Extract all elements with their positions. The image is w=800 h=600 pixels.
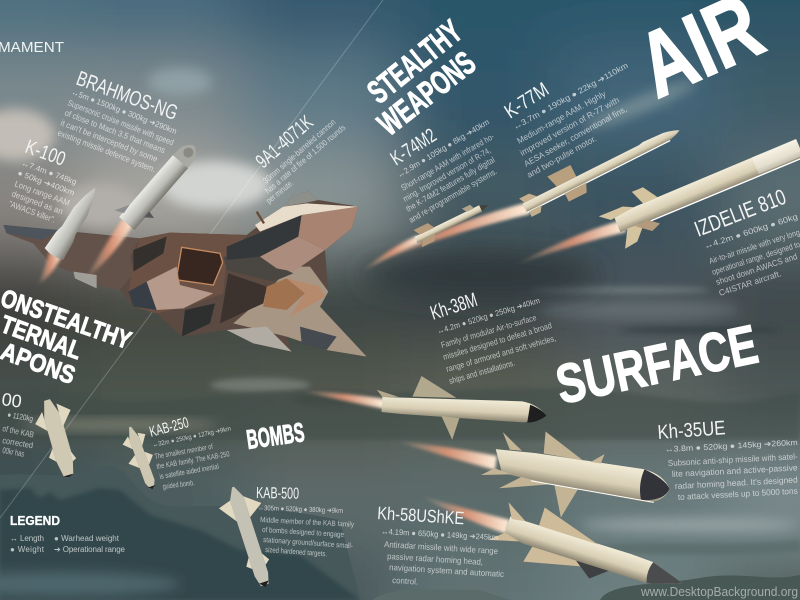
block: kh-35ue: to attack vessels up to 5000 tons: [678, 486, 798, 502]
heading: stealthy weapons: WEAPONS: [371, 44, 482, 143]
block: kab-250: guided bomb.: [162, 478, 195, 491]
missile plumes: [38, 203, 626, 534]
block: kab-1500: [0, 389, 35, 459]
block: kab-250: is satellite aided inertial: [159, 462, 220, 481]
missile: k-100: [44, 182, 105, 262]
block: kh-38m: missiles designed to defeat a broad: [442, 320, 553, 362]
block: brahmos-ng: [56, 67, 181, 174]
block: kab-250: KAB-250: [148, 414, 191, 441]
block: kab-250: [148, 414, 232, 491]
block: kab-1500: 00kr has: [2, 445, 25, 459]
block: kh-58ushke: [377, 503, 505, 587]
block: kh-38m: Family of modular Air-to-surface: [440, 312, 538, 350]
block: kab-500: sized hardened targets.: [265, 545, 327, 558]
block: kh-58ushke: passive radar homing head,: [387, 551, 483, 567]
block: k-74m2: ↔2.9m ● 105kg ● 8kg ➔40km: [395, 117, 491, 180]
bomb: kab-1500: [30, 394, 88, 482]
block: kab-500: of bombs designed to engage: [262, 525, 344, 539]
block: izdelie 810: ↔4.2m ● 600kg ● 60kg: [703, 212, 799, 251]
block: izdelie 810: C4ISTAR aircraft.: [718, 268, 782, 298]
block: brahmos-ng: of close to Mach 3.5 that means: [63, 108, 167, 155]
block: izdelie 810: [691, 184, 800, 298]
block: kh-58ushke: navigation system and automatic: [389, 562, 505, 579]
block: kab-250: The smallest member of: [154, 442, 214, 461]
missile: brahmos: [113, 134, 207, 235]
block: 9a1-4071k: 30mm single-barreled cannon: [261, 117, 338, 186]
legend: [10, 514, 126, 554]
block: k-74m2: K-74M2: [387, 125, 441, 170]
heading: stealthy weapons: [360, 12, 482, 143]
block: kab-1500: corrected: [2, 435, 34, 450]
block: k-100: designed as an: [10, 188, 65, 216]
block: kab-1500: of the KAB: [2, 423, 35, 440]
block: brahmos-ng: existing missile defence system.: [56, 128, 157, 174]
block: kab-250: ↔32m ● 250kg ● 127kg ➔9km: [152, 425, 232, 449]
block: kab-500: [256, 485, 354, 558]
missile: k-77m: [516, 114, 686, 221]
block: kh-58ushke: control.: [392, 575, 418, 587]
block: k-77m: ↔3.7m ● 190kg ● 22kg ➔110km: [512, 61, 630, 132]
legend: ➔ Operational range: [54, 545, 126, 554]
bomb: kab-250: [117, 423, 164, 494]
block: kh-35ue: lite navigation and active-passive: [672, 462, 798, 479]
block: k-77m: K-77M: [501, 79, 553, 123]
block: 9a1-4071k: has a rate of fire of 1,500 rounds: [263, 122, 347, 196]
block: k-100: K-100: [22, 136, 68, 171]
block: kh-38m: Kh-38M: [428, 289, 480, 325]
block: kab-500: KAB-500: [256, 485, 299, 503]
block: brahmos-ng: Supersonic cruise missile with speed: [66, 98, 176, 147]
block: k-100: Long range AAM: [13, 178, 71, 208]
block: 9a1-4071k: 9A1-4071K: [252, 111, 318, 173]
block: kab-250: the KAB family. The KAB-250: [156, 449, 230, 471]
legend: ● Weight: [10, 545, 45, 554]
block: k-77m: improved version of R-77 with: [518, 95, 621, 158]
heading: nonstealthy external weapons: ONSTEALTHY: [0, 284, 135, 355]
block: k-74m2: the K-74M2 features fully digital: [404, 155, 497, 214]
heading: bombs: BOMBS: [245, 417, 306, 455]
block: k-100: [7, 136, 78, 225]
block: k-77m: Medium-range AAM. Highly: [515, 88, 608, 146]
block: k-77m: and two-pulse motor.: [525, 133, 598, 180]
legend: ↔ Length: [10, 534, 44, 543]
heading: nonstealthy external weapons: TERNAL: [0, 310, 85, 365]
missile: kh-38m: [374, 374, 548, 445]
block: kh-35ue: Kh-35UE: [657, 417, 726, 444]
block: kh-38m: ships and installations.: [448, 358, 516, 386]
missile: kh-35ue: [476, 422, 676, 535]
missile: kh-58ushke: [485, 494, 691, 600]
block: 9a1-4071k: per minute.: [264, 178, 295, 206]
block: kab-500: Middle member of the KAB family: [260, 515, 354, 529]
block: kab-500: ↔305m ● 520kg ● 380kg ➔9km: [258, 505, 343, 515]
block: kh-58ushke: ↔4.19m ● 650kg ● 149kg ➔245km: [381, 527, 499, 542]
block: kh-38m: ↔4.2m ● 520kg ● 250kg ➔40km: [436, 296, 541, 336]
block: kh-58ushke: Kh-58UShKE: [377, 503, 465, 528]
block: kh-35ue: [657, 417, 798, 502]
block: k-100: ↔7.4m ● 748kg: [20, 158, 78, 187]
block: k-77m: AESA seeker, conventional fins,: [522, 104, 628, 169]
missile: k-74m2: [412, 196, 492, 248]
block: kab-500: stationary ground/surface small-: [263, 535, 354, 550]
block: kab-1500: ● 1120kg: [7, 410, 34, 423]
block: kh-58ushke: Antiradar missile with wide range: [384, 539, 499, 556]
bomb: kab-500: [214, 480, 286, 593]
block: brahmos-ng: ↔5m ● 1500kg ● 300kg ➔290km: [70, 87, 178, 136]
fighter jet: [3, 192, 367, 357]
block: kh-38m: [428, 289, 557, 386]
legend: ● Warhead weight: [54, 534, 120, 543]
legend: LEGEND: [10, 514, 60, 528]
block: brahmos-ng: it can't be intercepted by some: [59, 118, 159, 164]
block: kh-35ue: ↔3.8m ● 520kg ● 145kg ➔260km: [665, 438, 798, 454]
block: k-74m2: and re-programmable systems.: [407, 166, 499, 225]
block: kh-35ue: radar homing head. It's designed: [675, 475, 798, 491]
missile: izdelie 810: [595, 126, 800, 253]
block: k-74m2: ming. Improved version of R-74,: [401, 145, 493, 204]
block: kab-1500: 00: [0, 389, 23, 412]
block: k-100: ● 50kg ➔400km: [16, 168, 76, 198]
block: kh-38m: range of armored and soft vehicles,: [445, 333, 557, 374]
block: k-74m2: [387, 117, 499, 225]
heading: nonstealthy external weapons: [0, 284, 135, 390]
block: k-77m: [501, 61, 630, 180]
block: k-100: "AWACS killer".: [7, 198, 57, 225]
block: brahmos-ng: BRAHMOS-NG: [73, 67, 181, 125]
block: 9a1-4071k: [252, 111, 347, 206]
block: k-74m2: Short-range AAM with infrared ho-: [399, 131, 496, 193]
